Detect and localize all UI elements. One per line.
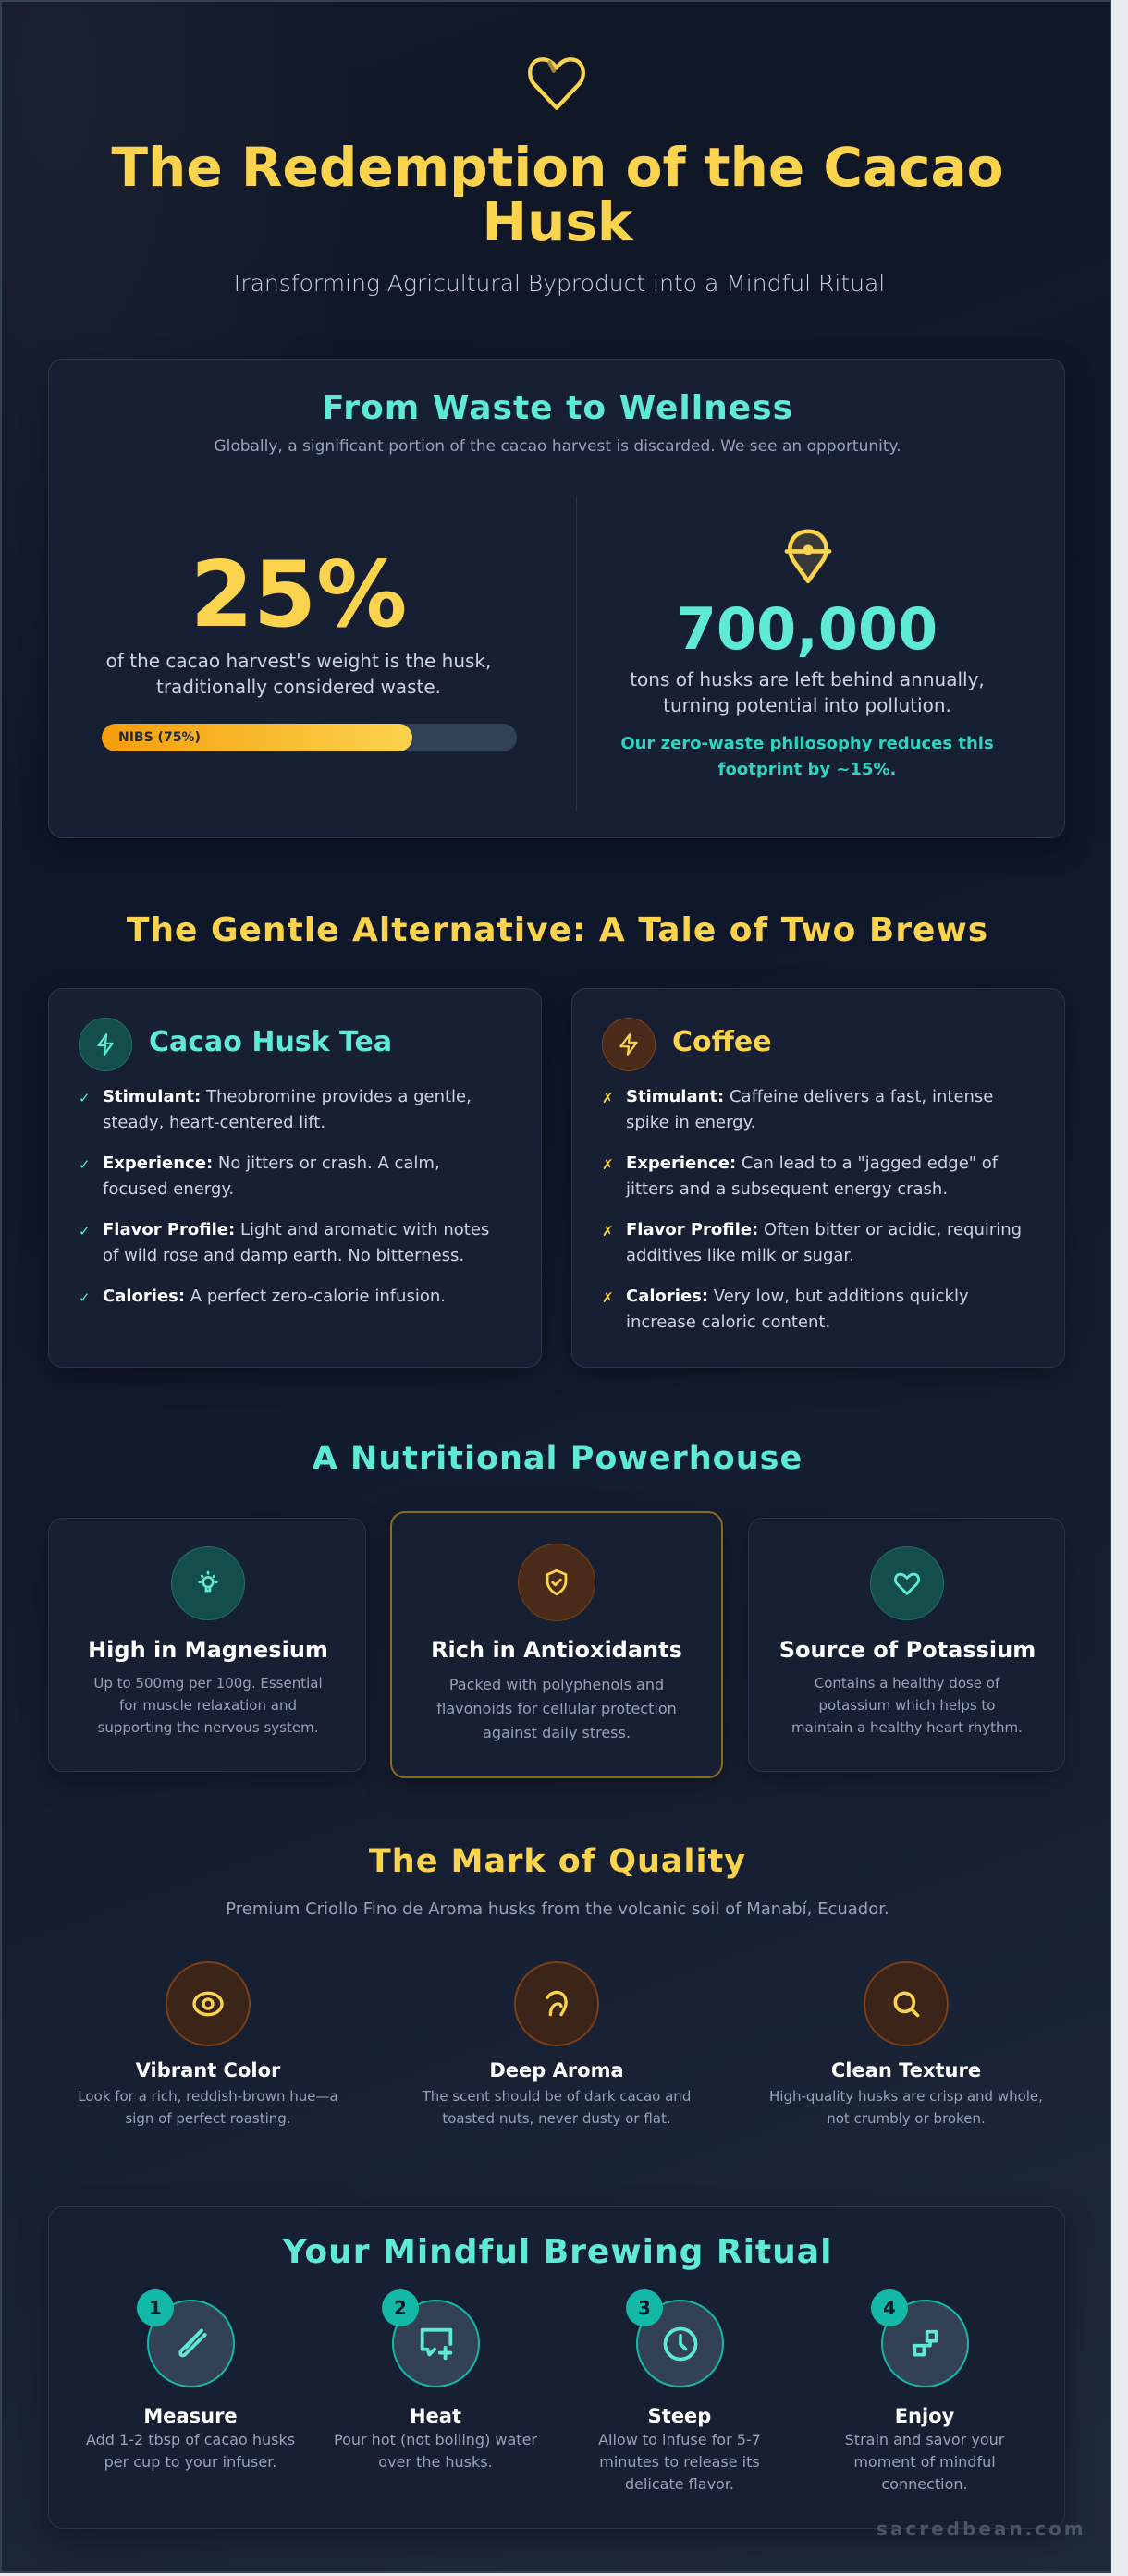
quality: clean texture: High-quality husks are crisp and whole, not crumbly or broken. [769, 2088, 1043, 2127]
title [111, 136, 1004, 253]
list [79, 1087, 489, 1306]
list: Flavor Profile: Light and aromatic with notes [103, 1220, 489, 1239]
list: increase caloric content. [626, 1312, 830, 1332]
stat: 700,000: turning potential into pollution. [663, 694, 951, 716]
icon: lightning [602, 1018, 656, 1071]
list: Stimulant: Theobromine provides a gentle, [103, 1087, 472, 1106]
list: of wild rose and damp earth. No bitterness. [103, 1246, 464, 1265]
icon: heart [870, 1546, 944, 1620]
stat: 25%: 25% [190, 543, 407, 648]
quality: deep aroma: Deep Aroma [489, 2059, 624, 2082]
heading: From Waste to Wellness [322, 389, 793, 427]
subtitle: Transforming Agricultural Byproduct into a Mindful Ritual [230, 270, 885, 297]
list: Stimulant: Caffeine delivers a fast, intense [626, 1087, 993, 1106]
step 1: Measure [143, 2405, 238, 2427]
panel: magnesium: High in Magnesium [88, 1637, 328, 1663]
title: The Redemption of the Cacao [111, 136, 1004, 199]
list: ✗ [602, 1223, 614, 1239]
list [602, 1087, 1022, 1332]
quality: vibrant color: Vibrant Color [136, 2059, 280, 2082]
quality: clean texture: Clean Texture [831, 2059, 981, 2082]
step 4 [845, 2289, 1004, 2493]
heading: nutritional powerhouse: A Nutritional Powerhouse [313, 1440, 803, 1477]
card title: Coffee [672, 1026, 772, 1058]
heading: mark of quality: The Mark of Quality [369, 1843, 746, 1880]
title: Husk [483, 190, 632, 253]
icon: sparkle [79, 1018, 132, 1071]
step 2: Heat [410, 2405, 461, 2427]
panel: from waste to wellness [48, 359, 1065, 838]
list: Flavor Profile: Often bitter or acidic, requiring [626, 1220, 1022, 1239]
icon: shield [518, 1544, 595, 1621]
bar chart: nibs 75% [102, 724, 517, 751]
card title: Cacao Husk Tea [149, 1026, 392, 1058]
stat: 700,000: footprint by ~15%. [718, 760, 896, 779]
step 2: 2 [394, 2297, 407, 2319]
step 3: Steep [648, 2405, 711, 2427]
quality: deep aroma [422, 1961, 691, 2127]
list: ✓ [79, 1223, 91, 1239]
list: spike in energy. [626, 1113, 755, 1132]
stat: 25%: of the cacao harvest's weight is the husk, [106, 650, 491, 672]
step 2 [334, 2289, 537, 2471]
intro text: Globally, a significant portion of the cacao harvest is discarded. We see an opportunity. [214, 437, 901, 456]
list: ✓ [79, 1090, 91, 1106]
heading: gentle alternative: The Gentle Alternative: A Tale of Two Brews [127, 911, 988, 949]
panel: potassium [748, 1518, 1065, 1772]
list: additives like milk or sugar. [626, 1246, 854, 1265]
list: ✓ [79, 1156, 91, 1173]
step 1: Add 1-2 tbsp of cacao husks per cup to your infuser. [86, 2431, 295, 2471]
panel: magnesium: Up to 500mg per 100g. Essential for muscle relaxation and supporting the nervous system. [93, 1675, 323, 1736]
step 4: Enjoy [895, 2405, 954, 2427]
list: ✗ [602, 1090, 614, 1106]
step 3 [598, 2289, 761, 2493]
panel: antioxidants [390, 1511, 723, 1778]
step 4: 4 [883, 2297, 896, 2319]
step 1: 1 [149, 2297, 162, 2319]
panel: magnesium [48, 1518, 366, 1772]
list: ✓ [79, 1289, 91, 1306]
stat: 25% [106, 543, 491, 698]
list: steady, heart-centered lift. [103, 1113, 325, 1132]
stat: 700,000: tons of husks are left behind annually, [630, 668, 985, 690]
quality: vibrant color: Look for a rich, reddish-brown hue—a sign of perfect roasting. [78, 2088, 338, 2127]
list: Calories: A perfect zero-calorie infusion. [103, 1287, 446, 1306]
list: ✗ [602, 1156, 614, 1173]
step 3: 3 [638, 2297, 651, 2319]
panel: potassium: Source of Potassium [779, 1637, 1036, 1663]
icon: bulb [171, 1546, 245, 1620]
panel: potassium: Contains a healthy dose of potassium which helps to maintain a healthy heart rhythm. [791, 1675, 1023, 1736]
quality: deep aroma: The scent should be of dark cacao and toasted nuts, never dusty or flat. [423, 2088, 691, 2127]
list: Calories: Very low, but additions quickly [626, 1287, 969, 1306]
bar chart: nibs 75%: NIBS (75%) [118, 730, 201, 745]
step 1 [86, 2289, 295, 2471]
heading: Your Mindful Brewing Ritual [283, 2233, 832, 2271]
list: focused energy. [103, 1179, 234, 1199]
list: ✗ [602, 1289, 614, 1306]
quality: vibrant color [78, 1961, 338, 2127]
footer: brand: sacredbean.com [877, 2518, 1086, 2540]
list: Experience: Can lead to a "jagged edge" of [626, 1154, 998, 1173]
stat: 700,000: 700,000 [677, 595, 938, 663]
stat: 25%: traditionally considered waste. [156, 676, 441, 698]
panel: brewing ritual [48, 2206, 1065, 2529]
quality subtitle: Premium Criollo Fino de Aroma husks from the volcanic soil of Manabí, Ecuador. [226, 1899, 889, 1919]
quality: clean texture [769, 1961, 1043, 2127]
stat: 700,000 [620, 595, 994, 779]
panel: antioxidants: Rich in Antioxidants [431, 1637, 682, 1663]
panel: cacao husk tea [48, 988, 542, 1368]
stat: 700,000: Our zero-waste philosophy reduces this [620, 734, 994, 753]
step 4: Strain and savor your moment of mindful connection. [845, 2431, 1004, 2493]
step 2: Pour hot (not boiling) water over the husks. [334, 2431, 537, 2471]
list: Experience: No jitters or crash. A calm, [103, 1154, 440, 1173]
step 3: Allow to infuse for 5-7 minutes to release its delicate flavor. [598, 2431, 761, 2493]
icon: map pin [784, 529, 832, 584]
panel: coffee [571, 988, 1065, 1368]
panel: antioxidants: Packed with polyphenols and flavonoids for cellular protection against daily stress. [436, 1676, 677, 1741]
list: jitters and a subsequent energy crash. [626, 1179, 948, 1199]
icon: heart [528, 57, 585, 110]
